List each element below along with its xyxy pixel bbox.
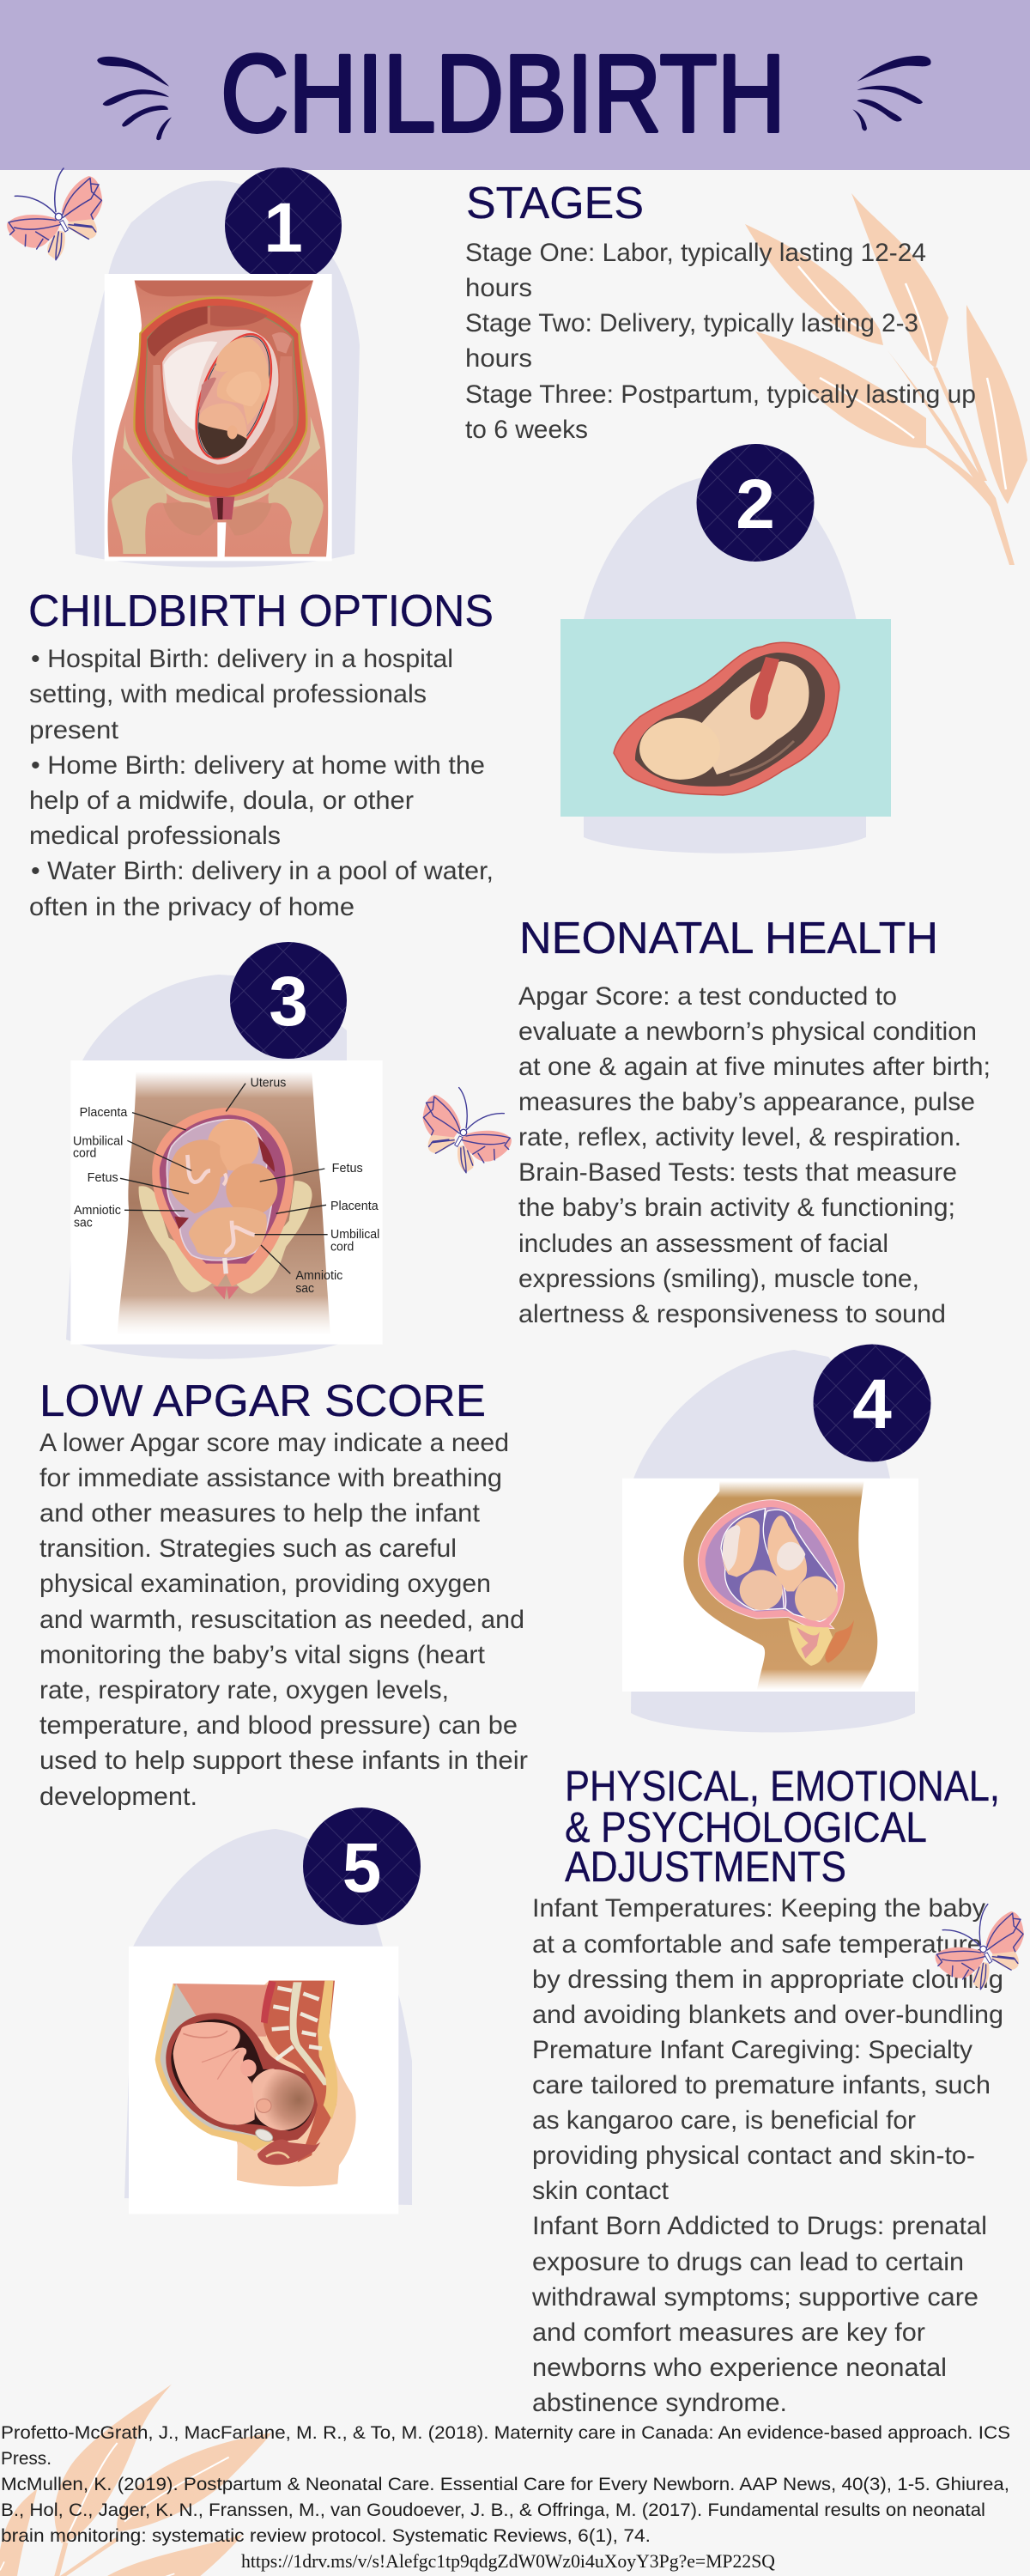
image: twin fetuses labelled diagram: cord bbox=[330, 1241, 354, 1255]
text block: childbirth options: present bbox=[29, 716, 119, 744]
image: twin fetuses labelled diagram: Umbilical bbox=[330, 1228, 379, 1242]
text block: neonatal health: at one & again at five minutes after birth; bbox=[518, 1053, 991, 1081]
text block: stages bbox=[465, 239, 976, 444]
backdrop blob 3 bbox=[66, 975, 347, 1359]
image: twin fetuses labelled diagram: sac bbox=[74, 1216, 93, 1230]
heading: low apgar score: LOW APGAR SCORE bbox=[39, 1376, 486, 1426]
text block: stages: hours bbox=[465, 344, 532, 373]
image: twin fetuses labelled diagram: Placenta bbox=[330, 1200, 379, 1213]
text block: neonatal health: the baby’s brain activity & functioning; bbox=[518, 1194, 955, 1222]
text block: neonatal health: rate, reflex, activity level, & respiration. bbox=[518, 1123, 961, 1151]
text block: neonatal health: expressions (smiling), muscle tone, bbox=[518, 1265, 919, 1293]
reference link: https://1drv.ms/v/s!Alefgc1tp9qdgZdW0Wz0i4uXoyY3Pg?e=MP22SQ bbox=[241, 2550, 775, 2572]
text block: childbirth options: medical professionals bbox=[29, 822, 281, 850]
references: Profetto-McGrath, J., MacFarlane, M. R., & To, M. (2018). Maternity care in Canada: An evidence-based approach. ICS bbox=[1, 2423, 1010, 2443]
number badge 4 bbox=[814, 1345, 930, 1461]
panel: stage 4 illustration bbox=[622, 1345, 930, 1733]
heading: childbirth options: CHILDBIRTH OPTIONS bbox=[28, 586, 494, 636]
heading: physical, emotional and psychological adjustments bbox=[565, 1762, 1000, 1891]
text block: neonatal health: measures the baby’s appearance, pulse bbox=[518, 1088, 975, 1116]
text block: low apgar score: for immediate assistance with breathing bbox=[39, 1464, 502, 1492]
text block: childbirth options: often in the privacy of home bbox=[29, 893, 354, 921]
icon: butterfly top left bbox=[7, 168, 102, 260]
text block: stages: Stage One: Labor, typically lasting 12-24 bbox=[465, 239, 926, 267]
text block: physical, emotional and psychological adjustments: and comfort measures are key for bbox=[532, 2318, 925, 2347]
number badge 3: 3 bbox=[269, 963, 308, 1041]
number badge 1 bbox=[225, 167, 342, 284]
text block: neonatal health bbox=[518, 982, 991, 1328]
icon: right title whiskers bbox=[852, 56, 931, 131]
backdrop blob 4 bbox=[631, 1350, 915, 1733]
text block: low apgar score: transition. Strategies such as careful bbox=[39, 1534, 457, 1563]
references bbox=[1, 2423, 1010, 2546]
number badge 1: 1 bbox=[264, 189, 303, 267]
image: sagittal section with full-term fetus bbox=[129, 1947, 398, 2214]
text block: low apgar score: and warmth, resuscitation as needed, and bbox=[39, 1606, 524, 1634]
number badge 4: 4 bbox=[852, 1365, 892, 1443]
panel: stage 1 illustration bbox=[72, 167, 360, 568]
image: twin fetuses labelled diagram: Uterus bbox=[251, 1077, 286, 1091]
text block: low apgar score: rate, respiratory rate, oxygen levels, bbox=[39, 1676, 449, 1704]
text block: childbirth options: • Water Birth: delivery in a pool of water, bbox=[31, 857, 494, 885]
text block: low apgar score: development. bbox=[39, 1783, 197, 1811]
decorative leaves: top right bbox=[745, 193, 1027, 565]
text block: stages: Stage Three: Postpartum, typically lasting up bbox=[465, 380, 976, 409]
decorative leaves: bottom left bbox=[0, 2385, 272, 2576]
text block: physical, emotional and psychological adjustments: exposure to drugs can lead to certain bbox=[532, 2248, 964, 2276]
text block: childbirth options bbox=[29, 645, 494, 921]
text block: physical, emotional and psychological adjustments: newborns who experience neonatal bbox=[532, 2354, 947, 2382]
image: twin fetuses labelled diagram: Fetus bbox=[88, 1171, 118, 1185]
text block: low apgar score: physical examination, providing oxygen bbox=[39, 1570, 491, 1598]
panel: stage 2 illustration bbox=[560, 444, 891, 854]
text block: neonatal health: evaluate a newborn’s physical condition bbox=[518, 1018, 977, 1046]
text block: neonatal health: alertness & responsiveness to sound bbox=[518, 1300, 946, 1328]
image: twin fetuses labelled diagram: Amniotic bbox=[295, 1269, 342, 1283]
text block: physical, emotional and psychological adjustments: as kangaroo care, is beneficial for bbox=[532, 2106, 916, 2135]
icon: butterfly middle bbox=[423, 1088, 512, 1173]
text block: neonatal health: includes an assessment of facial bbox=[518, 1230, 888, 1258]
text block: physical, emotional and psychological adjustments: Infant Born Addicted to Drugs: prenatal bbox=[532, 2212, 987, 2240]
text block: childbirth options: • Home Birth: delivery at home with the bbox=[31, 751, 485, 780]
backdrop blob 1 bbox=[72, 180, 360, 568]
number badge 3 bbox=[230, 942, 347, 1059]
text block: physical, emotional and psychological adjustments: and avoiding blankets and over-bundling bbox=[532, 2001, 1003, 2029]
number badge 5 bbox=[303, 1807, 421, 1925]
text block: stages: hours bbox=[465, 274, 532, 302]
image: twin fetuses labelled diagram: cord bbox=[73, 1147, 96, 1161]
backdrop blob 2 bbox=[584, 476, 866, 854]
text block: physical, emotional and psychological adjustments bbox=[531, 1894, 1003, 2417]
text block: childbirth options: • Hospital Birth: delivery in a hospital bbox=[31, 645, 453, 673]
backdrop blob 5 bbox=[124, 1829, 412, 2205]
text block: physical, emotional and psychological adjustments: skin contact bbox=[532, 2177, 670, 2205]
text block: low apgar score: used to help support these infants in their bbox=[39, 1747, 528, 1775]
image: side view twins in uterus bbox=[622, 1479, 918, 1692]
text block: physical, emotional and psychological adjustments: at a comfortable and safe temperature bbox=[532, 1930, 982, 1959]
heading: physical, emotional and psychological adjustments: ADJUSTMENTS bbox=[565, 1843, 846, 1891]
text block: neonatal health: Brain-Based Tests: tests that measure bbox=[518, 1158, 957, 1187]
text block: childbirth options: help of a midwife, doula, or other bbox=[29, 787, 414, 815]
heading: physical, emotional and psychological adjustments: & PSYCHOLOGICAL bbox=[565, 1803, 927, 1851]
image: abdomen cross-section with fetus bbox=[105, 274, 332, 561]
title: CHILDBIRTH bbox=[221, 33, 785, 155]
text block: physical, emotional and psychological adjustments: Premature Infant Caregiving: Specialty bbox=[532, 2036, 972, 2064]
number badge 2: 2 bbox=[736, 465, 775, 544]
text block: stages: Stage Two: Delivery, typically lasting 2-3 bbox=[465, 309, 918, 337]
text block: physical, emotional and psychological adjustments: withdrawal symptoms; supportive care bbox=[531, 2283, 978, 2312]
panel: stage 5 illustration bbox=[124, 1807, 421, 2214]
image: twin fetuses labelled diagram bbox=[70, 1060, 383, 1345]
text block: physical, emotional and psychological adjustments: Infant Temperatures: Keeping the baby bbox=[532, 1894, 985, 1923]
references: brain monitoring: systematic review protocol. Systematic Reviews, 6(1), 74. bbox=[1, 2526, 651, 2546]
image: twin fetuses labelled diagram: Amniotic bbox=[74, 1204, 121, 1218]
icon: left title whiskers bbox=[97, 57, 172, 140]
text block: physical, emotional and psychological adjustments: providing physical contact and skin-to- bbox=[532, 2142, 975, 2170]
text block: stages: to 6 weeks bbox=[465, 416, 588, 444]
text block: low apgar score bbox=[39, 1429, 528, 1811]
text block: physical, emotional and psychological adjustments: care tailored to premature infants, such bbox=[532, 2071, 991, 2099]
references: Press. bbox=[1, 2449, 52, 2469]
text block: low apgar score: monitoring the baby’s vital signs (heart bbox=[39, 1641, 486, 1669]
number badge 5: 5 bbox=[342, 1829, 381, 1907]
panel: stage 3 illustration bbox=[66, 942, 383, 1359]
image: fetus in uterus on teal bbox=[560, 619, 891, 817]
image: twin fetuses labelled diagram: sac bbox=[295, 1282, 314, 1296]
text block: low apgar score: A lower Apgar score may indicate a need bbox=[39, 1429, 509, 1457]
text block: neonatal health: Apgar Score: a test conducted to bbox=[518, 982, 897, 1011]
icon: butterfly right edge bbox=[936, 1905, 1024, 1990]
number badge 2 bbox=[697, 444, 814, 562]
text block: low apgar score: and other measures to help the infant bbox=[39, 1499, 481, 1528]
text block: physical, emotional and psychological adjustments: abstinence syndrome. bbox=[532, 2389, 787, 2417]
references: McMullen, K. (2019). Postpartum & Neonatal Care. Essential Care for Every Newborn. AAP News, 40(3), 1-5. Ghiurea, bbox=[1, 2475, 1009, 2494]
text block: low apgar score: temperature, and blood pressure) can be bbox=[39, 1711, 518, 1740]
references: B., Hol, C., Jager, K. N., Franssen, M., van Goudoever, J. B., & Offringa, M. (2017). Fundamental results on neonatal bbox=[1, 2500, 985, 2520]
image: twin fetuses labelled diagram: Placenta bbox=[80, 1106, 127, 1120]
heading: stages: STAGES bbox=[466, 179, 644, 228]
text block: physical, emotional and psychological adjustments: by dressing them in appropriate clothing bbox=[532, 1965, 1003, 1994]
text block: childbirth options: setting, with medical professionals bbox=[29, 680, 427, 708]
heading: neonatal health: NEONATAL HEALTH bbox=[519, 914, 938, 963]
image: twin fetuses labelled diagram: Fetus bbox=[332, 1162, 363, 1176]
image: twin fetuses labelled diagram: Umbilical bbox=[73, 1134, 123, 1148]
header banner bbox=[0, 0, 1030, 170]
